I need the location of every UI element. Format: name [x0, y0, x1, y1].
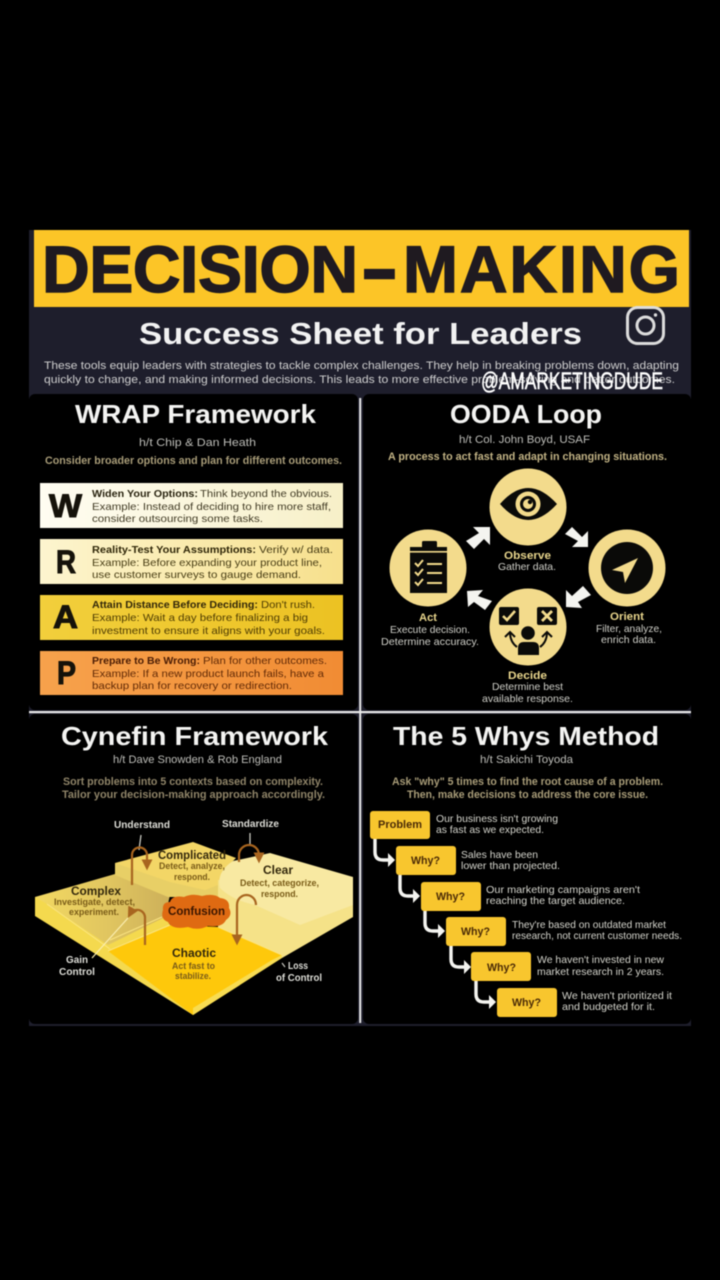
complicated wall — [115, 863, 225, 897]
title banner: MAKING — [403, 232, 680, 306]
step: why 5 — [497, 988, 672, 1017]
arrow: gain control — [92, 910, 145, 958]
step: why 1: Sales have been — [461, 849, 538, 861]
step: why 2: Why? — [436, 891, 465, 903]
confusion cloud: Confusion — [168, 906, 225, 918]
arrow: orient to decide — [566, 586, 591, 608]
label: chaotic: stabilize. — [175, 971, 211, 982]
OODA description: A process to act fast and adapt in changing situations. — [388, 451, 667, 463]
Cynefin description — [62, 776, 325, 801]
label: orient: enrich data. — [601, 634, 656, 646]
Cynefin credit: h/t Dave Snowden & Rob England — [113, 754, 282, 766]
label: complicated: respond. — [174, 872, 210, 883]
label: decide — [482, 670, 573, 705]
label: complicated: Detect, analyze, — [159, 861, 225, 872]
step: why 3: They're based on outdated market — [512, 919, 666, 931]
row W: consider outsourcing some tasks. — [92, 513, 263, 525]
5 Whys description — [392, 776, 663, 801]
connector arrows — [375, 839, 491, 1002]
title banner: - — [362, 231, 397, 305]
panel: 5 Whys method — [363, 714, 691, 1024]
label: complex: experiment. — [69, 907, 119, 918]
arrow: decide to act — [467, 590, 492, 610]
label: observe: Observe — [504, 550, 551, 562]
row P: Prepare to Be Wrong: — [92, 655, 200, 667]
panel: Cynefin framework — [29, 714, 358, 1024]
chaotic front edge — [193, 955, 282, 1015]
OODA credit: h/t Col. John Boyd, USAF — [459, 434, 590, 446]
step: why 4 — [471, 952, 664, 981]
sheet background — [29, 230, 691, 1026]
title banner — [34, 230, 689, 307]
arrow: standardize — [239, 833, 259, 862]
clear lower band — [218, 880, 353, 958]
row A: Example: Wait a day before finalizing a big — [92, 612, 308, 624]
Cynefin description: Tailor your decision-making approach accordingly. — [62, 789, 325, 801]
label: loss of control — [276, 961, 322, 984]
WRAP credit: h/t Chip & Dan Heath — [139, 437, 256, 449]
step: why 1: Why? — [411, 855, 440, 867]
label: chaotic — [172, 948, 217, 982]
row W: Example: Instead of deciding to hire more staff, — [92, 501, 331, 513]
row A: Attain Distance Before Deciding: — [92, 599, 258, 611]
step: why 1 — [396, 846, 560, 875]
step: why 3: research, not current customer needs. — [512, 930, 682, 942]
5 Whys description: Then, make decisions to address the core issue. — [407, 789, 648, 801]
row A — [40, 595, 343, 640]
label: understand: Understand — [114, 820, 170, 831]
arrow: observe to orient — [565, 527, 588, 547]
row A: Don't rush. — [261, 599, 315, 611]
subtitle: Success Sheet for Leaders — [139, 316, 582, 351]
arrow: act to observe — [466, 527, 490, 549]
label: observe: Gather data. — [498, 561, 556, 573]
row A: investment to ensure it aligns with your goals. — [92, 625, 325, 637]
Cynefin description: Sort problems into 5 contexts based on complexity. — [63, 776, 323, 788]
label: gain control: Gain — [66, 955, 88, 966]
icon: instagram — [628, 308, 664, 344]
clear domain — [219, 853, 353, 925]
5 Whys heading: The 5 Whys Method — [393, 721, 659, 751]
label: complex — [54, 886, 135, 918]
label: decide: Determine best — [492, 681, 563, 693]
5 Whys description: Ask "why" 5 times to find the root cause of a problem. — [392, 776, 663, 788]
label: loss of control: of Control — [276, 973, 322, 984]
row P: Example: If a new product launch fails, have a — [92, 668, 324, 680]
step: why 2 — [421, 882, 640, 911]
5 Whys credit: h/t Sakichi Toyoda — [480, 754, 574, 766]
label: complex: Complex — [71, 886, 122, 898]
row R: use customer surveys to gauge demand. — [92, 569, 301, 581]
label: observe — [498, 550, 556, 573]
complicated domain — [115, 842, 236, 890]
step: problem: as fast as we expected. — [436, 824, 544, 836]
OODA heading: OODA Loop — [450, 399, 602, 429]
step: why 4: market research in 2 years. — [537, 966, 664, 978]
label: complicated: Complicated — [158, 850, 226, 862]
label: complicated — [158, 850, 226, 883]
label: orient: Filter, analyze, — [596, 623, 662, 635]
label: decide: available response. — [482, 693, 573, 705]
row R — [40, 539, 343, 584]
arrow: understand — [132, 835, 147, 885]
icon: observe eye — [490, 468, 566, 546]
icon: decide choices — [490, 588, 566, 666]
step: why 4: Why? — [487, 962, 516, 974]
complex domain — [35, 874, 170, 945]
step: why 2: Our marketing campaigns aren't — [486, 884, 640, 896]
intro text: These tools equip leaders with strategies to tackle complex challenges. They help in breaking problems down, adapting — [44, 360, 679, 372]
confusion cloud — [162, 895, 230, 929]
label: orient — [596, 611, 662, 646]
label: loss of control: Loss — [288, 961, 308, 972]
panel: WRAP framework — [29, 394, 358, 710]
label: gain control: Control — [59, 967, 95, 978]
row P: Plan for other outcomes. — [203, 655, 327, 667]
label: act: Act — [419, 612, 437, 624]
step: problem — [370, 811, 558, 839]
row W: W — [49, 488, 83, 524]
step: why 3 — [446, 917, 682, 946]
panel: OODA loop — [363, 394, 691, 710]
WRAP heading: WRAP Framework — [75, 399, 317, 429]
step: why 1: lower than projected. — [461, 860, 560, 872]
icon: act clipboard — [390, 530, 466, 606]
step: problem: Our business isn't growing — [436, 813, 558, 825]
label: complex: Investigate, detect, — [54, 897, 135, 908]
row A: A — [53, 599, 78, 635]
row R: R — [56, 544, 76, 580]
label: chaotic: Act fast to — [172, 961, 215, 972]
row R: Example: Before expanding your product line, — [92, 557, 322, 569]
intro text: quickly to change, and making informed decisions. This leads to more effective problem-solving and better outcomes. — [44, 374, 675, 386]
Cynefin heading: Cynefin Framework — [61, 721, 329, 751]
label: orient: Orient — [610, 611, 644, 623]
diagram: Cynefin landscape — [35, 819, 353, 1015]
label: standardize: Standardize — [222, 819, 279, 830]
arrow: loss of control — [237, 895, 285, 967]
row P — [40, 651, 343, 695]
label: clear: respond. — [261, 889, 298, 900]
row P: P — [57, 655, 76, 691]
step: problem: Problem — [378, 819, 422, 831]
label: chaotic: Chaotic — [172, 948, 217, 960]
step: why 5: We haven't prioritized it — [562, 990, 672, 1002]
label: clear: Clear — [263, 865, 294, 877]
chaotic domain — [108, 925, 282, 1015]
step: why 5: Why? — [512, 997, 541, 1009]
label: clear — [240, 865, 319, 900]
step: why 4: We haven't invested in new — [537, 954, 664, 966]
row R: Reality-Test Your Assumptions: — [92, 544, 256, 556]
title banner: DECISION — [42, 232, 358, 306]
row R: Verify w/ data. — [259, 544, 333, 556]
label: act — [381, 612, 479, 648]
label: decide: Decide — [508, 670, 547, 682]
left base band — [35, 897, 240, 1015]
label: act: Execute decision. — [390, 624, 470, 636]
panel dividers — [29, 398, 691, 1023]
row W — [40, 483, 343, 528]
icon: orient compass — [588, 530, 666, 606]
label: gain control — [59, 955, 95, 978]
label: act: Determine accuracy. — [381, 636, 479, 648]
label: clear: Detect, categorize, — [240, 878, 319, 889]
step: why 2: reaching the target audience. — [486, 895, 625, 907]
WRAP description: Consider broader options and plan for different outcomes. — [45, 455, 342, 467]
intro text — [44, 360, 679, 386]
row W: Think beyond the obvious. — [200, 488, 332, 500]
row W: Widen Your Options: — [92, 488, 198, 500]
step: why 5: and budgeted for it. — [562, 1001, 655, 1013]
step: why 3: Why? — [461, 926, 490, 938]
row P: backup plan for recovery or redirection. — [92, 680, 292, 692]
